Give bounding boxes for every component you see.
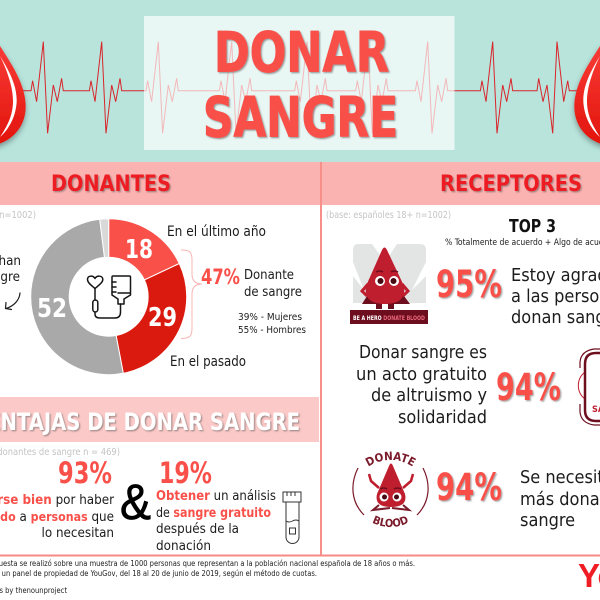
statement 3 — [520, 467, 600, 531]
total donors: Donante — [244, 268, 294, 283]
donut chart — [31, 219, 187, 375]
gender split: 55% - Hombres — [238, 325, 306, 336]
icon: donate blood mascot: DONATE — [365, 452, 416, 466]
stat: 19%: donación — [156, 538, 211, 554]
label: último año: En el último año — [167, 224, 266, 240]
gender split — [238, 312, 306, 336]
heartbeat line — [22, 42, 578, 133]
heading: receptores: RECEPTORES — [440, 172, 582, 197]
total donors — [201, 265, 302, 300]
statement 2: solidaridad — [398, 407, 487, 428]
title: SANGRE — [203, 86, 398, 150]
stat: 94% top: 94% — [496, 366, 561, 409]
title: DONAR — [214, 20, 389, 84]
statement 2: Donar sangre es — [359, 342, 487, 363]
icon: blood transfusion — [88, 276, 130, 318]
icon: donate blood mascot: BLOOD — [372, 516, 408, 528]
icon: be a hero mascot: BE A HERO DONATE BLOOD — [353, 314, 425, 322]
donut values: 29 — [148, 303, 177, 333]
title — [203, 20, 398, 150]
statement 2: un acto gratuito — [356, 364, 487, 385]
icon: test tube — [283, 492, 301, 544]
title box — [144, 16, 454, 150]
icon: left blood drop — [0, 46, 26, 145]
stat: 19% — [156, 456, 276, 554]
stat: 19%: Obtener un análisis — [156, 488, 276, 504]
panel: receptores — [326, 210, 600, 531]
section header band — [0, 162, 600, 205]
base note: (base: españoles 18+ n=1002) — [326, 210, 451, 221]
donut values: 52 — [37, 294, 67, 324]
stat: 93% — [0, 456, 114, 541]
vertical divider — [320, 162, 322, 555]
stat: 93%: lo necesitan — [42, 526, 114, 541]
icon: save lives badge — [578, 349, 600, 425]
ampersand: & — [120, 474, 151, 530]
label: pasado: En el pasado — [170, 354, 246, 370]
total donors: de sangre — [244, 285, 302, 300]
statement 3: sangre — [520, 510, 575, 531]
donut values: 18 — [125, 235, 153, 265]
statement 1 — [511, 265, 600, 328]
banner: ventajas — [0, 397, 319, 442]
stat: 94% bottom: 94% — [436, 466, 502, 509]
icon: donate blood mascot — [352, 452, 429, 528]
panel: donantes — [0, 210, 306, 375]
brace — [181, 250, 202, 338]
non donors label — [0, 254, 21, 285]
statement 2 — [356, 342, 487, 428]
total donors: 47% — [201, 265, 240, 289]
stat: 19%: después de la — [156, 521, 239, 537]
icon: be a hero mascot — [350, 244, 428, 324]
icon: right blood drop — [574, 46, 600, 145]
hero background — [0, 0, 600, 162]
stat: 19%: 19% — [159, 456, 212, 490]
stat: 19%: de sangre gratuito — [156, 506, 271, 521]
gender split: 39% - Mujeres — [238, 312, 302, 323]
stat: 95%: 95% — [436, 263, 502, 306]
statement 2: de altruismo y — [371, 385, 487, 406]
stat: 93%: 93% — [58, 456, 112, 490]
footer rule — [0, 554, 600, 556]
footnote — [0, 559, 415, 595]
donut values — [37, 235, 177, 333]
heading: donantes: DONANTES — [51, 172, 171, 197]
top 3 heading: TOP 3 — [509, 216, 556, 237]
arrow — [6, 293, 20, 310]
